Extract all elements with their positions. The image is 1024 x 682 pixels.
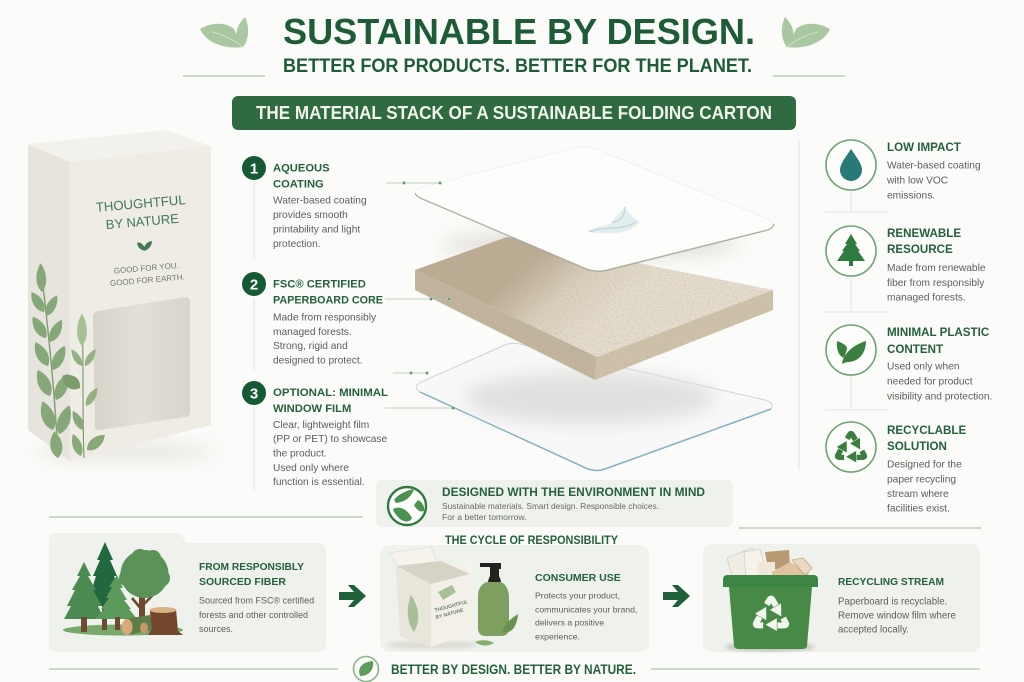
panel: from responsibly sourced fiber: Sourced from FSC® certified xyxy=(199,596,314,606)
item 3: window film: Used only where xyxy=(273,463,349,474)
panel: from responsibly sourced fiber: forests and other controlled xyxy=(199,610,308,620)
panel: consumer use: Protects your product, xyxy=(535,590,620,600)
panel: consumer use: experience. xyxy=(535,632,580,642)
divider right of stack xyxy=(798,140,800,470)
illustration: forest xyxy=(63,542,183,636)
layer: paperboard core xyxy=(415,237,773,380)
cycle heading: THE CYCLE OF RESPONSIBILITY xyxy=(445,533,618,547)
item 1: aqueous coating: COATING xyxy=(273,178,324,190)
benefit: minimal plastic: needed for product xyxy=(887,376,973,388)
subtitle: BETTER FOR PRODUCTS. BETTER FOR THE PLANET. xyxy=(283,55,752,77)
benefit: low impact: Water-based coating xyxy=(887,160,981,172)
benefit: recyclable solution: SOLUTION xyxy=(887,440,947,453)
item 2: paperboard core: Made from responsibly xyxy=(273,312,377,324)
benefit: low impact: LOW IMPACT xyxy=(887,141,961,154)
item 3: window film: WINDOW FILM xyxy=(273,403,351,415)
divider left xyxy=(49,516,363,518)
panel: benefits column xyxy=(825,140,992,514)
benefit: renewable resource: RENEWABLE xyxy=(887,227,961,240)
leader line: film xyxy=(385,372,454,409)
item 3: window film xyxy=(242,381,388,488)
benefit: renewable resource xyxy=(826,226,986,304)
benefit: minimal plastic: visibility and protection. xyxy=(887,392,992,402)
panel: designed with the environment xyxy=(376,480,733,527)
item 3: window film: the product. xyxy=(273,448,327,460)
benefit: recyclable solution: facilities exist. xyxy=(887,504,950,514)
icon: right header leaves xyxy=(782,17,830,48)
benefit: low impact: emissions. xyxy=(887,190,935,202)
icon: globe xyxy=(388,487,426,525)
panel: recycling stream: Remove window film where xyxy=(838,610,956,622)
item 1: aqueous coating: printability and light xyxy=(273,224,360,236)
divider bottom left xyxy=(49,668,338,670)
arrow: fiber to use xyxy=(339,585,366,607)
footer tagline: BETTER BY DESIGN. BETTER BY NATURE. xyxy=(391,662,636,677)
illustration: open carton and pump bottle xyxy=(386,547,518,649)
benefit: minimal plastic: CONTENT xyxy=(887,343,943,356)
carton plant art xyxy=(27,263,108,459)
benefit: renewable resource: fiber from responsibly xyxy=(887,278,985,289)
benefit: low impact xyxy=(826,140,981,202)
benefit: minimal plastic: Used only when xyxy=(887,362,960,372)
shadow under board xyxy=(465,372,715,424)
item 3: window film: OPTIONAL: MINIMAL xyxy=(273,387,388,399)
illustration: recycling bin xyxy=(723,548,818,651)
item 2: paperboard core: FSC® CERTIFIED xyxy=(273,278,366,290)
benefit: renewable resource: Made from renewable xyxy=(887,263,986,274)
benefit: renewable resource: managed forests. xyxy=(887,292,966,304)
carton text: THOUGHTFUL xyxy=(95,192,186,215)
panel: consumer use: communicates your brand, xyxy=(535,604,637,614)
section banner xyxy=(232,96,796,130)
panel: recycling stream xyxy=(703,544,980,652)
panel: from responsibly sourced fiber xyxy=(49,533,326,652)
item 2: paperboard core: 2 xyxy=(250,276,258,294)
benefit: renewable resource: RESOURCE xyxy=(887,243,953,256)
material stack illustration xyxy=(385,147,774,470)
benefit: recyclable solution: stream where xyxy=(887,489,949,500)
item 1: aqueous coating xyxy=(242,156,367,250)
benefit: minimal plastic xyxy=(826,325,992,402)
panel: designed with the environment: Sustainable materials. Smart design. Responsible choices. xyxy=(442,501,659,511)
header rule left xyxy=(183,75,265,77)
panel: from responsibly sourced fiber: SOURCED FIBER xyxy=(199,576,286,588)
leader line: coating xyxy=(386,182,441,184)
header rule right xyxy=(773,75,845,77)
panel: designed with the environment: For a better tomorrow. xyxy=(442,512,527,522)
arrow: use to recycling xyxy=(663,585,690,607)
carton text: BY NATURE xyxy=(105,211,180,232)
benefit: low impact: with low VOC xyxy=(886,176,948,186)
shadow under top sheet xyxy=(440,231,740,259)
item 2: paperboard core: Strong, rigid and xyxy=(273,341,348,352)
panel: recycling stream: Paperboard is recyclable. xyxy=(838,596,947,608)
item 3: window film: function is essential. xyxy=(273,477,365,488)
panel: consumer use: CONSUMER USE xyxy=(535,572,621,584)
carton text: GOOD FOR EARTH. xyxy=(110,272,185,288)
item 3: window film: Clear, lightweight film xyxy=(273,420,369,431)
benefit: minimal plastic: MINIMAL PLASTIC xyxy=(887,326,990,339)
layer: window film xyxy=(416,343,772,470)
title: SUSTAINABLE BY DESIGN. xyxy=(283,11,755,52)
divider right xyxy=(739,527,981,529)
item 3: window film: 3 xyxy=(250,386,258,402)
item 1: aqueous coating: Water-based coating xyxy=(273,196,367,206)
panel: recycling stream: RECYCLING STREAM xyxy=(838,576,944,588)
panel: consumer use: delivers a positive xyxy=(535,618,604,628)
carton text xyxy=(95,192,193,289)
section banner: THE MATERIAL STACK OF A SUSTAINABLE FOLDING CARTON xyxy=(256,103,772,123)
item 2: paperboard core: designed to protect. xyxy=(273,356,362,366)
panel: from responsibly sourced fiber: sources. xyxy=(199,624,233,634)
panel: consumer use xyxy=(380,545,649,652)
layer: aqueous coating sheet xyxy=(415,147,774,271)
illustration: open carton and pump bottle: BY NATURE xyxy=(435,608,465,621)
benefit: recyclable solution: paper recycling xyxy=(887,474,956,486)
panel: recycling stream: accepted locally. xyxy=(838,624,909,636)
item 1: aqueous coating: AQUEOUS xyxy=(273,162,330,174)
benefit: recyclable solution: Designed for the xyxy=(887,460,962,470)
item 3: window film: (PP or PET) to showcase xyxy=(273,434,388,445)
divider bottom right xyxy=(651,668,980,670)
item 2: paperboard core xyxy=(242,272,384,366)
benefit: recyclable solution xyxy=(826,422,966,514)
illustration: open carton and pump bottle: THOUGHTFUL xyxy=(434,599,469,614)
item 1: aqueous coating: 1 xyxy=(250,160,258,178)
panel: numbered material layers xyxy=(242,156,388,490)
item 1: aqueous coating: provides smooth xyxy=(273,210,348,221)
carton illustration xyxy=(27,130,215,461)
panel: designed with the environment: DESIGNED WITH THE ENVIRONMENT IN MIND xyxy=(442,485,705,499)
benefit: recyclable solution: RECYCLABLE xyxy=(887,424,966,437)
icon: footer leaf xyxy=(354,656,378,682)
leader line: core xyxy=(385,298,450,300)
item 1: aqueous coating: protection. xyxy=(273,239,321,250)
carton text: GOOD FOR YOU. xyxy=(113,261,179,276)
panel: from responsibly sourced fiber: FROM RESPONSIBLY xyxy=(199,561,304,573)
item 2: paperboard core: managed forests. xyxy=(273,327,352,338)
item 2: paperboard core: PAPERBOARD CORE xyxy=(273,294,384,306)
icon: left header leaves xyxy=(200,17,248,48)
